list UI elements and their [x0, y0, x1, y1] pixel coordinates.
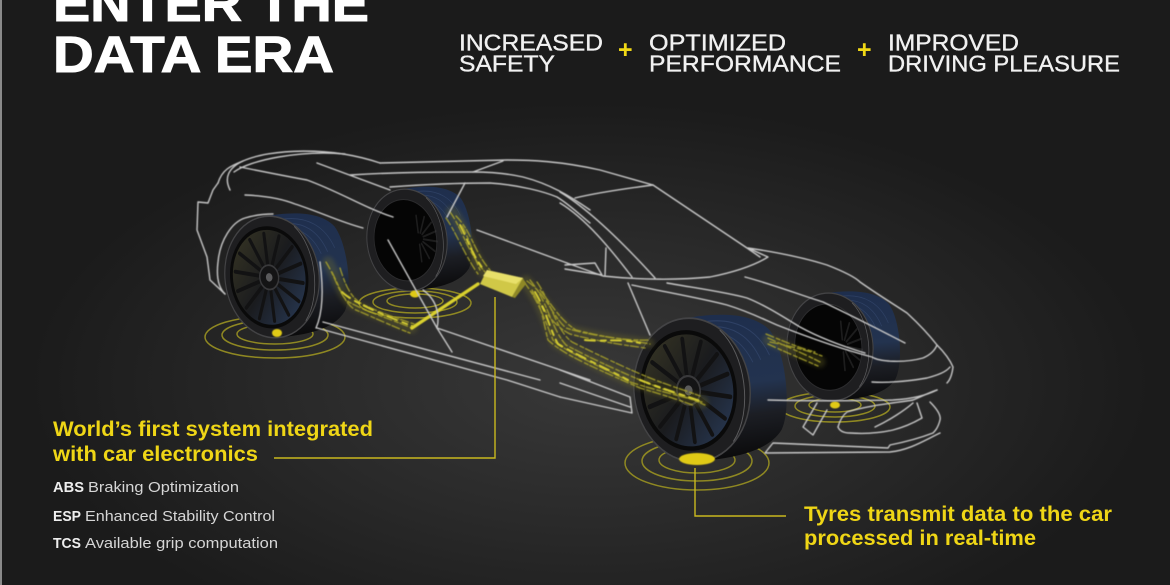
benefits headline: DRIVING PLEASURE [888, 50, 1120, 76]
list of car systems [53, 480, 278, 552]
benefits headline [459, 30, 1120, 76]
benefits headline: + [857, 36, 872, 64]
TCS item: TCS [53, 536, 81, 552]
title: DATA ERA [53, 26, 334, 83]
ESP item: Enhanced Stability Control [85, 509, 275, 525]
callout: tyres transmit data [804, 503, 1112, 550]
far front tyre [782, 287, 904, 405]
sensor signal rings [205, 288, 890, 490]
TCS item: Available grip computation [85, 536, 278, 552]
ABS item: Braking Optimization [88, 480, 239, 496]
callout: car electronics heading [52, 418, 373, 466]
benefits headline: PERFORMANCE [649, 50, 841, 76]
control unit [480, 270, 526, 298]
benefits headline: IMPROVED [888, 30, 1019, 56]
callout: tyres transmit data: processed in real-time [804, 527, 1036, 550]
benefits headline: INCREASED [459, 30, 603, 56]
title [53, 0, 369, 83]
ABS item: ABS [53, 480, 84, 496]
benefits headline: OPTIMIZED [649, 30, 786, 56]
callout: car electronics heading: with car electronics [52, 443, 258, 466]
far rear tyre [361, 181, 478, 295]
ESP item: ESP [53, 509, 81, 525]
car wireframe outline [197, 151, 953, 453]
callout leader: sensor to tyres text [695, 468, 786, 516]
near front tyre [626, 307, 794, 469]
data flow from tyres to control unit [326, 212, 822, 406]
near rear tyre [218, 207, 355, 343]
callout leader: control unit to electronics text [274, 297, 495, 458]
callout: car electronics heading: World’s first system integrated [53, 418, 373, 441]
benefits headline: + [618, 36, 633, 64]
callout: tyres transmit data: Tyres transmit data to the car [804, 503, 1112, 526]
sensors [272, 290, 840, 465]
benefits headline: SAFETY [459, 50, 555, 76]
